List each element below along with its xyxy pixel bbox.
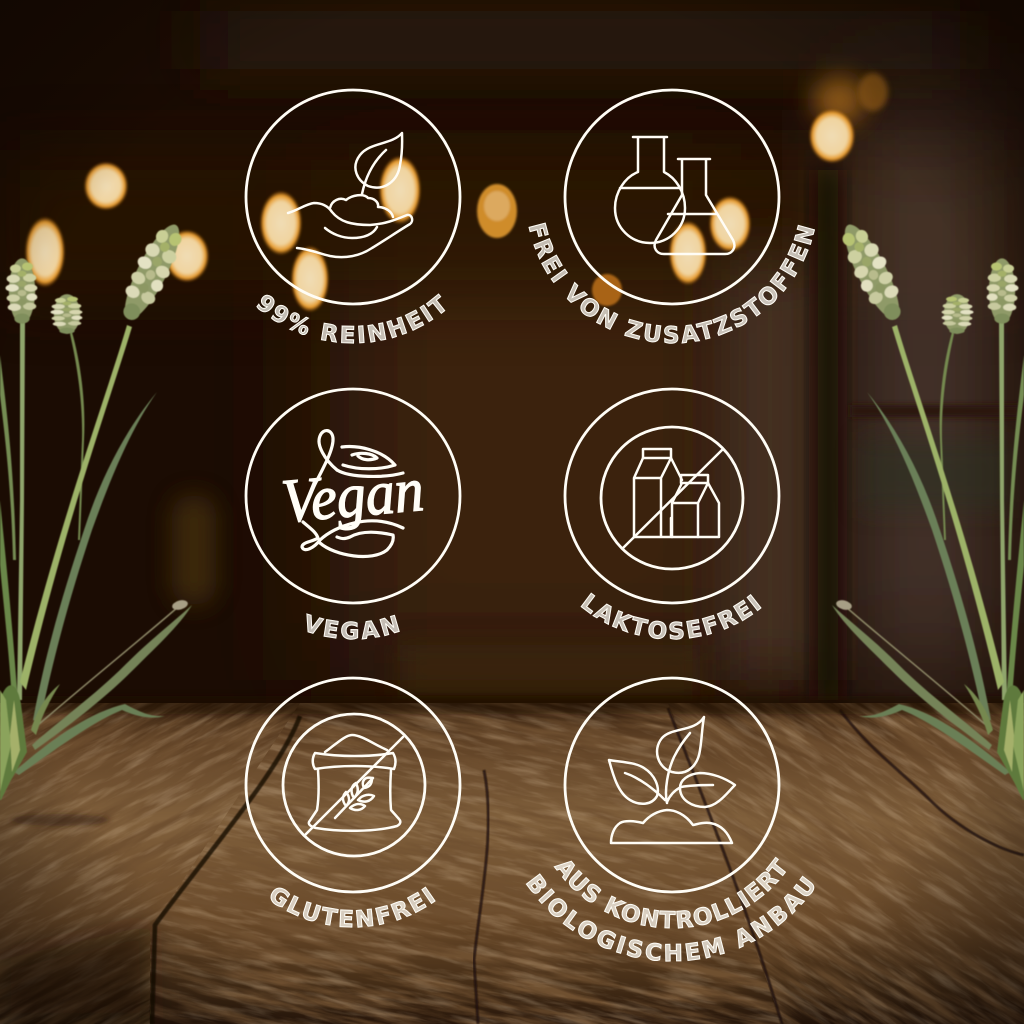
plant: right grass: [832, 217, 1024, 800]
badge: Frei von Zusatzstoffen: [528, 88, 815, 344]
bokeh lights: [25, 109, 855, 312]
badge ring: [246, 389, 460, 603]
badge ring: [246, 90, 460, 304]
badge: Vegan: [244, 388, 462, 640]
badge ring: [565, 678, 779, 892]
icon: vegan script logo: [279, 431, 426, 556]
label: Glutenfrei: GLUTENFREI: [270, 886, 436, 928]
badge: Glutenfrei: [244, 676, 462, 928]
inner prohibition ring: [283, 714, 425, 856]
wooden table: [0, 696, 1024, 1024]
label: Vegan: VEGAN: [306, 613, 400, 640]
badge: Laktosefrei: [564, 388, 780, 640]
icon: vegan script logo: Vegan: [279, 456, 426, 536]
icon: sprout in soil: [609, 717, 735, 843]
badge ring: [565, 389, 779, 603]
label: 99% Reinheit: 99% REINHEIT: [256, 293, 446, 344]
icon: hand holding soil and sprout: [288, 133, 412, 257]
badge ring: [565, 90, 779, 304]
label: Aus kontrolliert: AUS KONTROLLIERT: [554, 856, 786, 929]
badge: Aus kontrolliert biologischem Anbau: [526, 676, 814, 962]
icon: laboratory flasks: [615, 137, 734, 254]
badge: 99% Reinheit: [244, 88, 462, 344]
icon: crossed-out grain sack: [305, 735, 403, 835]
label: Frei von Zusatzstoffen: FREI VON ZUSATZSTOFFEN: [528, 222, 815, 344]
plant: left grass: [0, 217, 192, 800]
icon: crossed-out milk cartons: [623, 449, 722, 548]
badge ring: [246, 678, 460, 892]
inner prohibition ring: [601, 427, 743, 569]
label: biologischem Anbau: BIOLOGISCHEM ANBAU: [526, 873, 814, 962]
label: Laktosefrei: LAKTOSEFREI: [580, 592, 762, 640]
